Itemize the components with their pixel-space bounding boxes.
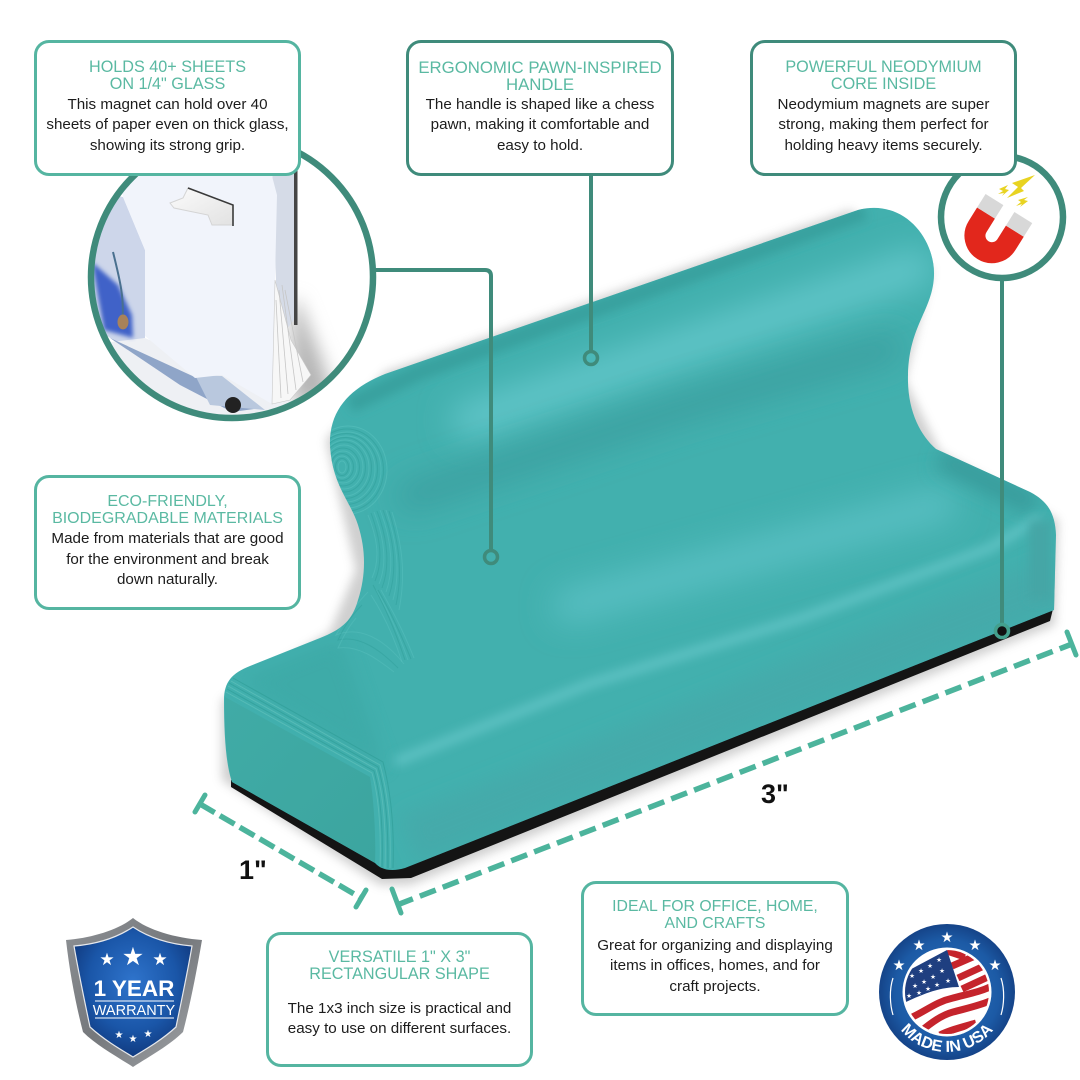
badge: made in USA <box>879 924 1015 1060</box>
dimension line: 3 inch <box>392 632 1076 913</box>
heading: HANDLE <box>506 74 574 94</box>
badge stars: ★ <box>988 958 1002 974</box>
panel: neodymium core <box>750 40 1017 176</box>
flag: ★ <box>909 972 915 980</box>
flag: ★ <box>916 989 922 997</box>
flag: ★ <box>925 985 931 993</box>
heading: RECTANGULAR SHAPE <box>309 965 490 983</box>
flag: ★ <box>930 973 936 981</box>
heading: VERSATILE 1" X 3" <box>329 948 470 966</box>
body text: showing its strong grip. <box>90 136 245 154</box>
body text: This magnet can hold over 40 <box>67 96 268 112</box>
body text: items in offices, homes, and for <box>610 957 820 974</box>
badge stars: ★ <box>912 938 926 954</box>
flag: ★ <box>927 962 933 970</box>
heading: HOLDS 40+ SHEETS <box>89 58 246 76</box>
heading <box>309 948 490 983</box>
badge stars: ★ <box>968 938 982 954</box>
panel: versatile shape <box>266 932 533 1067</box>
badge stars: ★ <box>892 958 906 974</box>
body text <box>46 96 289 154</box>
body text: holding heavy items securely. <box>784 136 983 154</box>
badge stars <box>892 930 1002 974</box>
dimension line: 1 inch <box>195 795 366 907</box>
icon: horseshoe magnet in circle <box>941 156 1063 278</box>
heading <box>418 58 662 94</box>
body text <box>597 936 833 994</box>
flag: ★ <box>906 992 912 1000</box>
panel: holds 40+ sheets <box>34 40 301 176</box>
shield stars: ★ <box>144 1029 153 1040</box>
panel: ideal for office <box>581 881 849 1016</box>
body text: for the environment and break <box>66 550 269 568</box>
badge: 1 year warranty shield: WARRANTY <box>93 1003 176 1019</box>
warranty text: 1 YEAR <box>94 976 174 1001</box>
shield stars: ★ <box>115 1030 124 1041</box>
body text: The 1x3 inch size is practical and <box>288 1000 511 1016</box>
flag <box>905 950 989 1034</box>
heading <box>89 58 246 92</box>
body text: pawn, making it comfortable and <box>431 116 649 133</box>
dimension label: 3 inch: 3" <box>761 779 789 809</box>
icon: photo of magnet holding paper stack <box>85 136 373 425</box>
shield stars: ★ <box>122 942 144 971</box>
connector: handle callout <box>584 175 598 364</box>
heading: ECO-FRIENDLY, <box>107 493 228 510</box>
shield stars: ★ <box>99 950 115 970</box>
shield stars: ★ <box>152 950 168 970</box>
body text <box>51 530 284 588</box>
heading: IDEAL FOR OFFICE, HOME, <box>612 898 818 914</box>
dimension label: 1 inch: 1" <box>239 855 267 885</box>
body text: sheets of paper even on thick glass, <box>46 116 289 133</box>
flag: ★ <box>921 978 927 986</box>
product illustration and connectors <box>66 150 1078 1067</box>
connector: photo to eco body point <box>375 270 498 564</box>
body text: easy to use on different surfaces. <box>288 1020 511 1037</box>
shading of the handle <box>470 268 915 420</box>
panel: eco-friendly <box>34 475 301 610</box>
badge: 1 year warranty shield <box>66 918 202 1067</box>
heading: ON 1/4" GLASS <box>110 74 225 92</box>
body text: down naturally. <box>117 571 218 588</box>
curved label <box>893 1018 1001 1052</box>
concentric ripples on the head <box>330 426 388 514</box>
panel: ergonomic handle <box>406 40 674 176</box>
badge stars: ★ <box>940 930 954 946</box>
flag: ★ <box>934 981 940 989</box>
shield stars <box>99 942 168 1045</box>
heading: CORE INSIDE <box>831 74 936 92</box>
flag: ★ <box>912 982 918 990</box>
body text: Great for organizing and displaying <box>597 936 833 954</box>
heading <box>52 493 283 527</box>
horseshoe magnet <box>960 194 1032 265</box>
heading: AND CRAFTS <box>665 915 765 932</box>
heading <box>785 58 982 92</box>
body text: Neodymium magnets are super <box>778 96 989 112</box>
flag: ★ <box>936 956 942 964</box>
body text: strong, making them perfect for <box>778 116 989 133</box>
lightning bolts <box>998 175 1035 207</box>
shield stars: ★ <box>129 1034 138 1045</box>
flag: ★ <box>918 967 924 975</box>
body text <box>778 96 990 154</box>
heading: POWERFUL NEODYMIUM <box>785 58 982 76</box>
ground shadow of magnet <box>222 210 1058 885</box>
badge: made in USA: MADE IN USA <box>901 1023 994 1052</box>
magnet body <box>224 208 1056 870</box>
heading: ERGONOMIC PAWN-INSPIRED <box>418 58 662 76</box>
heading: BIODEGRADABLE MATERIALS <box>52 510 283 527</box>
heading <box>612 898 818 932</box>
body text <box>288 1000 511 1037</box>
body text: easy to hold. <box>497 136 583 154</box>
body text: craft projects. <box>669 978 761 994</box>
connector: neodymium core <box>996 278 1008 638</box>
body text: Made from materials that are good <box>51 530 284 547</box>
flag: ★ <box>939 967 945 975</box>
end face <box>225 697 375 863</box>
body text: The handle is shaped like a chess <box>426 96 654 112</box>
magnet base felt strip <box>231 605 1054 879</box>
ribbed edges <box>226 426 414 868</box>
flag: ★ <box>945 977 951 985</box>
neck ripples <box>368 510 403 610</box>
body text <box>426 96 654 154</box>
